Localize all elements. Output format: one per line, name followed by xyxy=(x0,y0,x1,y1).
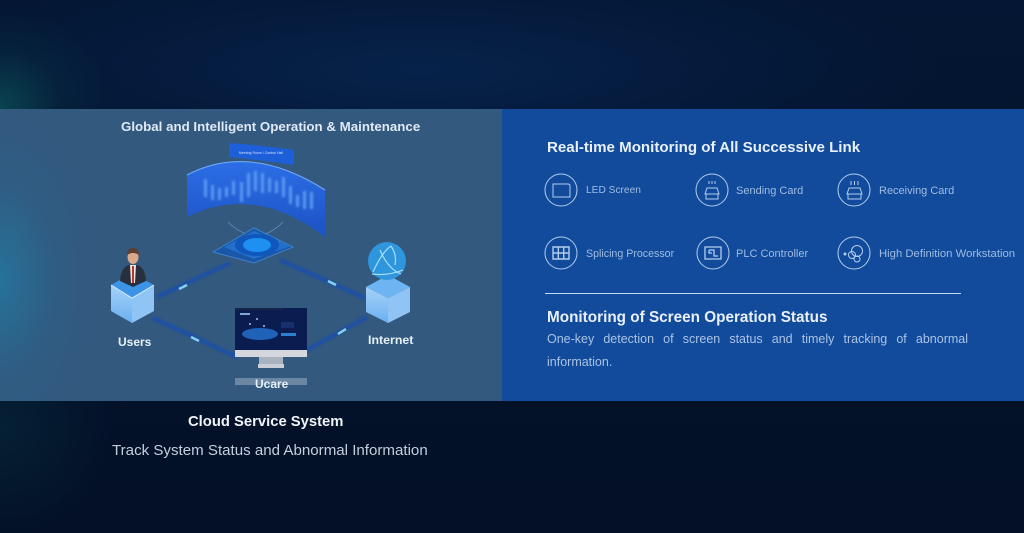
icon: splicing processor xyxy=(544,236,578,270)
item: LED screen xyxy=(544,174,641,206)
item: receiving card xyxy=(838,174,954,206)
caption heading: cloud service system: Cloud Service System xyxy=(188,414,343,430)
icon: PLC controller xyxy=(696,236,730,270)
item: sending card xyxy=(696,174,803,206)
curved data screen xyxy=(187,162,325,237)
text: description: One-key detection of screen status and timely tracking of abnormal xyxy=(547,332,968,346)
small top label panel: Meeting Room / Control Hall xyxy=(239,151,283,155)
item: PLC controller xyxy=(696,236,808,270)
label: Splicing Processor xyxy=(586,248,674,260)
label: internet: Internet xyxy=(368,333,413,347)
connector highlights xyxy=(179,281,346,341)
label: PLC Controller xyxy=(736,248,808,260)
icon: workstation xyxy=(838,236,870,270)
panel: monitoring xyxy=(502,109,1024,401)
caption text: track system status: Track System Status and Abnormal Information xyxy=(112,442,428,459)
label: ucare: Ucare xyxy=(255,377,288,391)
small top label panel xyxy=(229,143,294,165)
label: Sending Card xyxy=(736,185,803,197)
heading: real-time monitoring: Real-time Monitoring of All Successive Link xyxy=(547,139,860,156)
text: description xyxy=(547,332,968,369)
item: splicing processor xyxy=(544,236,674,270)
connector lines xyxy=(153,260,367,357)
internet cube xyxy=(366,275,410,323)
icon: person xyxy=(120,248,146,287)
label: users: Users xyxy=(118,335,151,349)
label: Receiving Card xyxy=(879,185,954,197)
label: LED Screen xyxy=(586,185,641,196)
diagram illustration xyxy=(110,143,410,385)
icon: receiving card xyxy=(838,174,870,206)
heading: global and intelligent operation: Global and Intelligent Operation & Maintenance xyxy=(121,119,420,134)
item: high definition workstation xyxy=(838,236,1015,270)
icon: sending card xyxy=(696,174,728,206)
monitor xyxy=(235,308,307,385)
users cube xyxy=(111,273,154,323)
label: High Definition Workstation xyxy=(879,248,1015,260)
heading: monitoring of screen operation status: Monitoring of Screen Operation Status xyxy=(547,309,827,326)
icon: globe xyxy=(368,242,406,280)
central platform xyxy=(213,222,293,263)
panel: cloud service diagram xyxy=(0,109,502,401)
icon: LED screen xyxy=(544,174,578,206)
text: description: information. xyxy=(547,355,612,369)
